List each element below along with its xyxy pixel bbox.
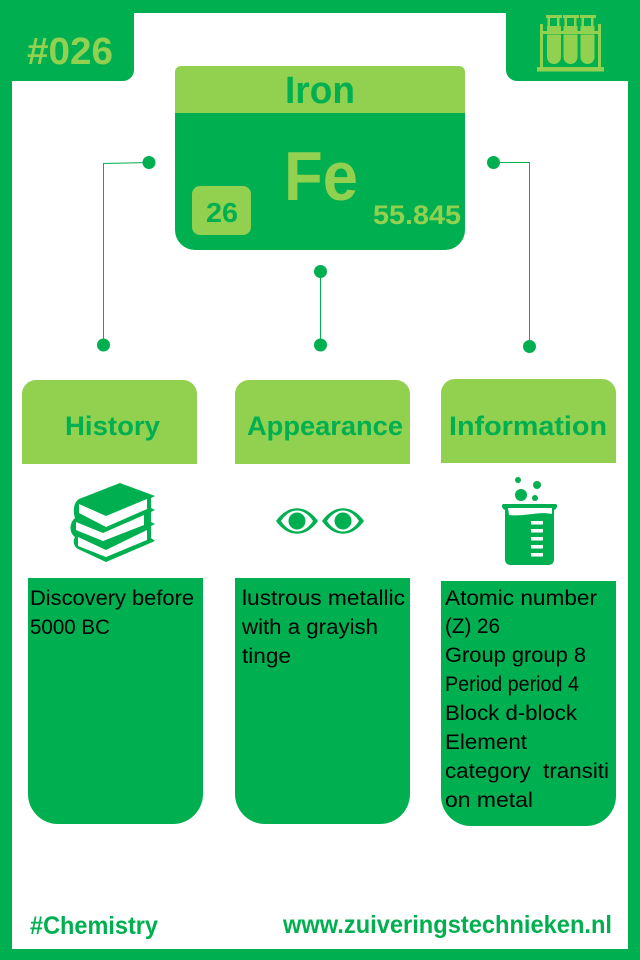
atomic number badge	[192, 186, 251, 235]
panel: information body: (Z) 26	[445, 615, 500, 638]
panel: information header: Information	[449, 411, 607, 441]
number tab	[0, 0, 134, 81]
panel: information body: Group group 8	[445, 644, 586, 667]
icon: eyes	[276, 508, 364, 534]
panel: information body: Atomic number	[445, 587, 597, 610]
atomic number badge: 26	[206, 197, 238, 228]
panel: history body: Discovery before	[30, 587, 194, 610]
element name: Iron	[285, 70, 355, 112]
panel: appearance body: tinge	[242, 645, 291, 668]
panel: appearance body: with a grayish	[241, 616, 378, 639]
panel: history header	[22, 380, 197, 464]
connector: appearance	[314, 265, 327, 352]
element symbol: Fe	[284, 137, 358, 215]
element card	[175, 66, 465, 250]
panel: information body: Period period 4	[445, 673, 579, 696]
panel: information body: on metal	[445, 789, 533, 812]
panel: appearance header	[235, 380, 410, 464]
panel: history body: 5000 BC	[30, 616, 110, 639]
card body	[175, 113, 465, 250]
panel: information body	[441, 581, 616, 826]
panel: history header: History	[65, 411, 160, 441]
panel: appearance header: Appearance	[247, 411, 403, 441]
atomic mass: 55.845	[373, 200, 461, 230]
icon: beaker	[502, 477, 557, 565]
hashtag footer: #Chemistry	[30, 912, 158, 940]
panel: information body: Element	[445, 731, 527, 754]
website footer: www.zuiveringstechnieken.nl	[282, 911, 612, 939]
panel: history body	[28, 578, 203, 824]
panel: information body: category transiti	[445, 760, 609, 783]
icon tab	[506, 0, 640, 81]
panel: appearance body	[235, 578, 410, 824]
panel: information header	[441, 379, 616, 463]
connector: history	[97, 156, 156, 352]
panel: appearance body: lustrous metallic	[242, 587, 405, 610]
icon: test tubes	[537, 15, 604, 72]
element number: #026	[27, 31, 113, 73]
icon: books	[70, 483, 155, 562]
connector: information	[487, 156, 536, 353]
card header	[175, 66, 465, 113]
panel: information body: Block d-block	[445, 702, 578, 725]
